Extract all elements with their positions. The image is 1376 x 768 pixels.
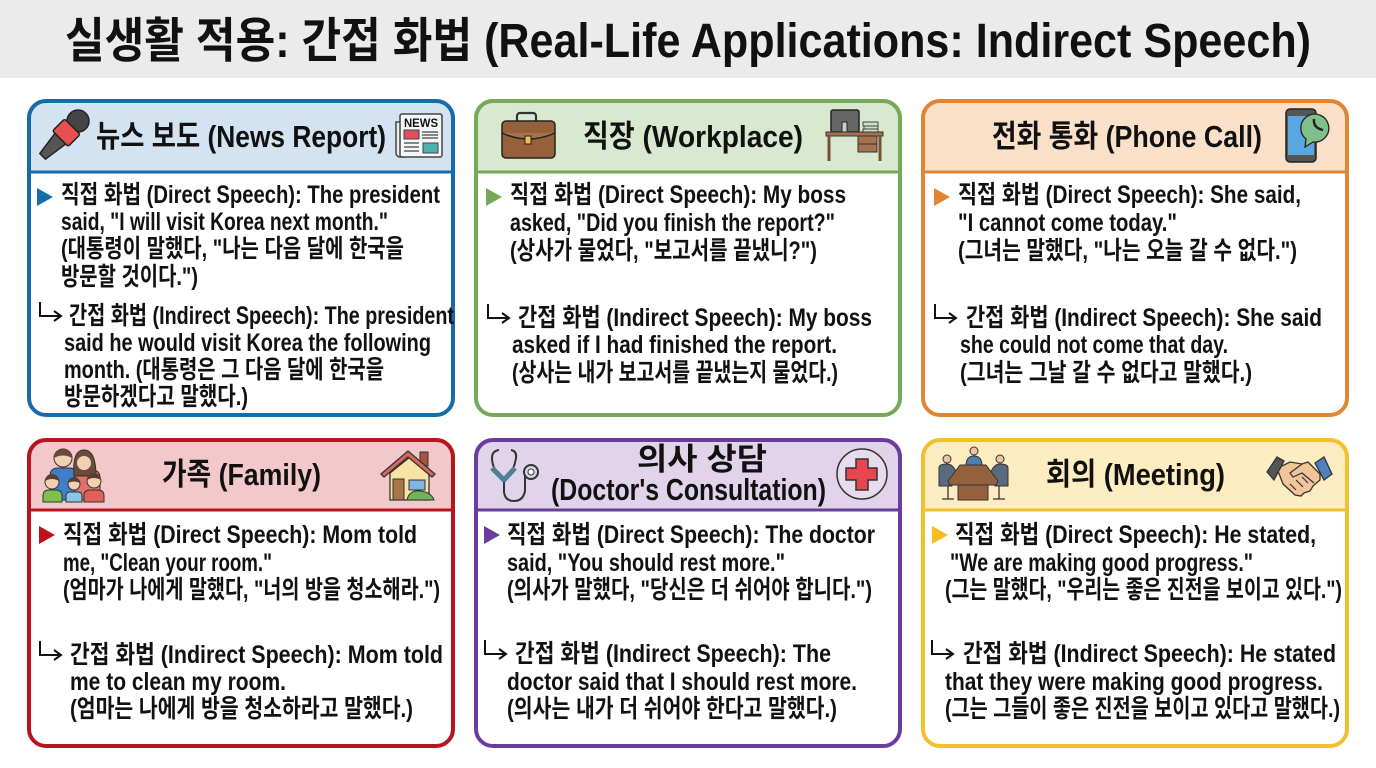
panel: workplace xyxy=(474,99,902,415)
direct speech: doctor's consultation xyxy=(484,521,875,604)
direct speech: news report: (대통령이 말했다, "나는 다음 달에 한국을 xyxy=(61,235,404,263)
indirect speech: doctor's consultation: doctor said that I should rest more. xyxy=(507,668,857,696)
icon: desk xyxy=(826,110,883,161)
icon: stethoscope xyxy=(492,450,538,501)
panel: family xyxy=(27,438,455,746)
icon: medical cross xyxy=(837,449,887,499)
heading: doctor's consultation: (Doctor's Consultation) xyxy=(551,472,826,507)
indirect speech: family: (엄마는 나에게 방을 청소하라고 말했다.) xyxy=(70,695,413,723)
direct speech: phone call: 직접 화법 (Direct Speech): She said, xyxy=(958,181,1301,209)
indirect speech: news report: said he would visit Korea the following xyxy=(64,329,431,357)
direct speech: news report xyxy=(37,181,441,291)
panel: phone call xyxy=(921,99,1349,415)
indirect speech: family: me to clean my room. xyxy=(70,668,286,696)
heading: family: 가족 (Family) xyxy=(162,457,321,492)
direct speech: meeting: 직접 화법 (Direct Speech): He stated, xyxy=(955,521,1316,549)
indirect speech: family: 간접 화법 (Indirect Speech): Mom told xyxy=(70,641,443,669)
direct speech: news report: said, "I will visit Korea next month." xyxy=(61,208,388,236)
indirect speech: news report: 간접 화법 (Indirect Speech): The president xyxy=(69,302,455,330)
direct speech: doctor's consultation: (의사가 말했다, "당신은 더 쉬어야 합니다.") xyxy=(507,576,872,604)
indirect speech: phone call: she could not come that day. xyxy=(960,331,1228,359)
icon: newspaper: NEWS xyxy=(404,118,438,130)
indirect speech: workplace: (상사는 내가 보고서를 끝냈는지 물었다.) xyxy=(512,359,838,387)
direct speech: news report: 방문할 것이다.") xyxy=(61,263,198,291)
icon: meeting table xyxy=(939,447,1008,500)
indirect speech: workplace xyxy=(488,304,872,387)
direct speech: meeting xyxy=(932,521,1342,604)
indirect speech: workplace: 간접 화법 (Indirect Speech): My boss xyxy=(518,304,872,332)
heading: phone call: 전화 통화 (Phone Call) xyxy=(992,119,1262,154)
direct speech: doctor's consultation: said, "You should rest more." xyxy=(507,549,785,577)
title banner xyxy=(0,0,1376,78)
direct speech: meeting: "We are making good progress." xyxy=(950,549,1253,577)
indirect speech: news report: 방문하겠다고 말했다.) xyxy=(64,383,248,411)
direct speech: family: 직접 화법 (Direct Speech): Mom told xyxy=(63,521,417,549)
panel: meeting xyxy=(921,438,1349,746)
indirect speech: meeting xyxy=(932,640,1340,723)
icon: newspaper xyxy=(396,114,442,157)
direct speech: family: me, "Clean your room." xyxy=(63,549,272,577)
indirect speech: news report: month. (대통령은 그 다음 달에 한국을 xyxy=(64,356,384,384)
direct speech: workplace: (상사가 물었다, "보고서를 끝냈니?") xyxy=(510,237,817,265)
icon: microphone xyxy=(35,105,94,164)
indirect speech: doctor's consultation: (의사는 내가 더 쉬어야 한다고 말했다.) xyxy=(507,695,837,723)
icon: family xyxy=(43,449,104,502)
indirect speech: phone call xyxy=(935,304,1322,387)
icon: briefcase xyxy=(502,113,555,158)
indirect speech: doctor's consultation xyxy=(485,640,857,723)
indirect speech: workplace: asked if I had finished the report. xyxy=(512,331,837,359)
direct speech: phone call: (그녀는 말했다, "나는 오늘 갈 수 없다.") xyxy=(958,237,1297,265)
direct speech: phone call xyxy=(934,181,1301,265)
indirect speech: phone call: (그녀는 그날 갈 수 없다고 말했다.) xyxy=(960,359,1252,387)
direct speech: news report: 직접 화법 (Direct Speech): The president xyxy=(61,181,441,209)
direct speech: family: (엄마가 나에게 말했다, "너의 방을 청소해라.") xyxy=(63,576,440,604)
direct speech: workplace: asked, "Did you finish the report?" xyxy=(510,209,835,237)
direct speech: workplace xyxy=(486,181,846,265)
heading: news report: 뉴스 보도 (News Report) xyxy=(96,119,386,154)
icon: handshake xyxy=(1267,457,1332,496)
heading: workplace: 직장 (Workplace) xyxy=(583,119,803,154)
direct speech: phone call: "I cannot come today." xyxy=(958,209,1177,237)
icon: smartphone with chat bubble xyxy=(1286,109,1329,162)
panel: doctor's consultation xyxy=(474,438,902,746)
heading: meeting: 회의 (Meeting) xyxy=(1046,457,1225,492)
heading: doctor's consultation xyxy=(551,442,826,507)
icon: house xyxy=(381,451,435,500)
direct speech: family xyxy=(39,521,440,604)
indirect speech: doctor's consultation: 간접 화법 (Indirect Speech): The xyxy=(515,640,831,668)
indirect speech: family xyxy=(40,641,443,723)
direct speech: workplace: 직접 화법 (Direct Speech): My boss xyxy=(510,181,846,209)
panel: news report xyxy=(27,99,455,415)
indirect speech: news report xyxy=(40,302,455,411)
direct speech: doctor's consultation: 직접 화법 (Direct Speech): The doctor xyxy=(507,521,875,549)
heading: doctor's consultation: 의사 상담 xyxy=(637,442,767,477)
